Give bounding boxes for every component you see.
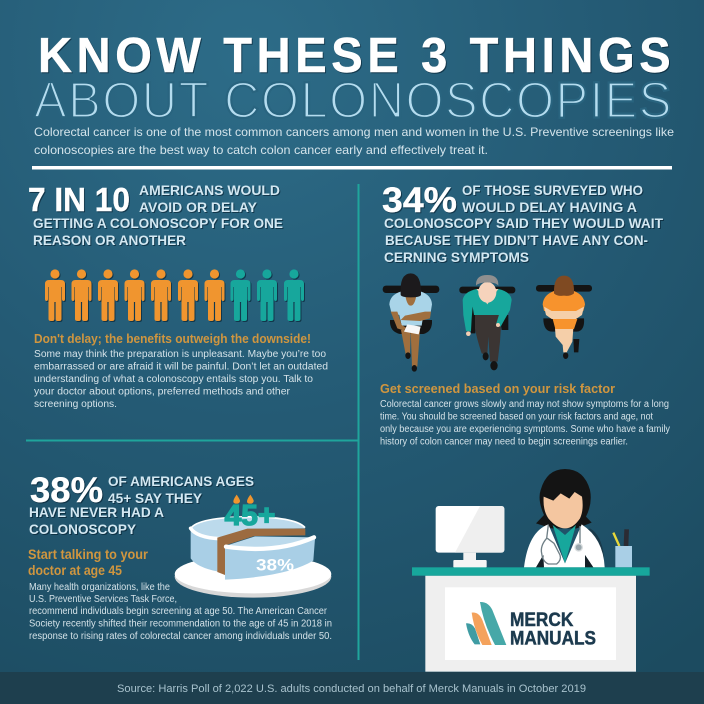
intro text: Colorectal cancer is one of the most common cancers among men and women in the U.S. Preventive screenings like <box>34 125 674 139</box>
body text: don't delay <box>34 349 328 410</box>
heading: 38 percent: HAVE NEVER HAD A <box>29 504 164 520</box>
body text: risk factor: Colorectal cancer grows slowly and may not show symptoms for a long <box>380 399 669 410</box>
header rule <box>32 166 672 170</box>
subheading: don't delay: Don't delay; the benefits outweigh the downside! <box>34 332 311 346</box>
body text: risk factor: only because you are experiencing symptoms. Some who have a family <box>380 424 670 435</box>
title: ABOUT COLONOSCOPIES <box>34 72 671 129</box>
heading: 34 percent: CERNING SYMPTOMS <box>384 249 529 265</box>
Merck Manuals logo: MANUALS <box>510 628 596 649</box>
heading: 38 percent: 38% <box>30 471 103 510</box>
heading: 34 percent: 34% <box>382 181 457 220</box>
illustration: three seated people from above <box>383 273 592 372</box>
heading: 7 in 10: AMERICANS WOULD <box>139 182 280 198</box>
body text: start talking: U.S. Preventive Services Task Force, <box>29 594 177 605</box>
panel: 34 percent <box>380 181 670 448</box>
source text: Source: Harris Poll of 2,022 U.S. adults conducted on behalf of Merck Manuals in October 2019 <box>117 683 586 695</box>
cake body <box>191 517 315 580</box>
subheading: start talking <box>28 547 149 578</box>
body text: start talking: Society recently shifted their recommendation to the age of 45 in 2018 in <box>29 618 332 630</box>
subheading: start talking: doctor at age 45 <box>28 563 122 578</box>
section divider lines <box>26 184 360 660</box>
heading: 7 in 10 <box>28 181 283 248</box>
heading: 7 in 10: 7 IN 10 <box>28 181 130 218</box>
plate <box>175 555 331 598</box>
person 3 <box>536 276 592 359</box>
Merck Manuals logo: MERCK <box>510 610 573 631</box>
heading: 38 percent: COLONOSCOPY <box>29 521 137 537</box>
heading: 7 in 10: REASON OR ANOTHER <box>33 232 186 248</box>
heading: 7 in 10: AVOID OR DELAY <box>139 199 258 215</box>
body text: don't delay: Some may think the preparation is unpleasant. Maybe you’re too <box>34 349 326 360</box>
heading: 34 percent: COLONOSCOPY SAID THEY WOULD WAIT <box>384 215 663 231</box>
body text: don't delay: screening options. <box>34 399 117 410</box>
footer band <box>0 672 704 704</box>
body text: start talking <box>29 582 332 642</box>
subheading: start talking: Start talking to your <box>28 547 149 562</box>
body text: start talking: Many health organizations, like the <box>29 582 170 593</box>
intro text: colonoscopies are the best way to catch colon cancer early and effectively treat it. <box>34 143 488 157</box>
body text: don't delay: understanding of what a colonoscopy entails stop you. Talk to <box>34 374 313 385</box>
panel: 7 in 10 <box>28 181 328 410</box>
person 1 <box>383 273 439 372</box>
body text: start talking: response to rising rates of colorectal cancer among individuals under 50. <box>29 631 332 642</box>
heading: 34 percent <box>382 181 663 265</box>
45+ label: 45+ <box>225 500 275 532</box>
heading: 34 percent: OF THOSE SURVEYED WHO <box>462 182 643 198</box>
body text: risk factor <box>380 399 670 448</box>
heading: 38 percent: OF AMERICANS AGES <box>108 473 254 489</box>
body text: start talking: recommend individuals begin screening at age 50. The American Cancer <box>29 606 328 617</box>
intro text <box>34 125 674 157</box>
heading: 38 percent: 45+ SAY THEY <box>108 490 203 506</box>
pen cup <box>613 529 632 567</box>
body text: don't delay: your doctor about options, preferred methods and other <box>34 386 291 398</box>
title <box>34 29 671 129</box>
desk <box>412 567 650 672</box>
heading: 34 percent: BECAUSE THEY DIDN’T HAVE ANY CON- <box>385 232 648 248</box>
panel: 38 percent <box>28 471 332 642</box>
body text: risk factor: history of colon cancer may need to begin screenings earlier. <box>380 436 628 448</box>
body text: risk factor: time. You should be screened based on your risk factors and age, not <box>380 412 653 422</box>
illustration: cake <box>175 495 331 598</box>
person 2 <box>459 275 515 370</box>
candles <box>233 495 254 504</box>
38% label: 38% <box>256 556 294 575</box>
subheading: risk factor: Get screened based on your risk factor <box>380 382 615 396</box>
body text: don't delay: embarrassed or are afraid it will be painful. Don’t let an outdated <box>34 362 328 372</box>
illustration: doctor at desk <box>412 469 650 672</box>
computer monitor <box>436 506 504 568</box>
pictogram: 7 of 10 people <box>45 269 304 321</box>
heading: 38 percent <box>29 471 254 537</box>
heading: 7 in 10: GETTING A COLONOSCOPY FOR ONE <box>33 215 283 231</box>
heading: 34 percent: WOULD DELAY HAVING A <box>462 199 637 215</box>
Merck Manuals logo <box>466 602 596 649</box>
doctor <box>524 469 605 567</box>
title: KNOW THESE 3 THINGS <box>38 29 671 83</box>
